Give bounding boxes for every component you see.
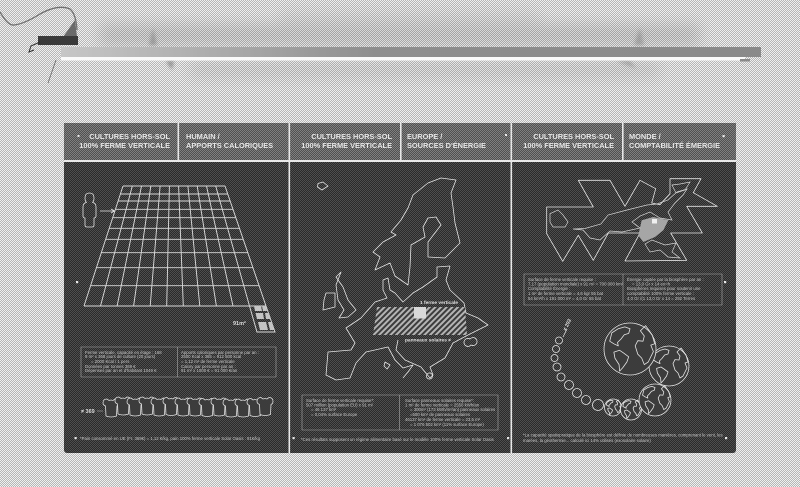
- globe: small: [604, 399, 622, 416]
- map: hatched solar panel area: [373, 307, 467, 335]
- heading: panel 2 left: 100% FERME VERTICALE: [301, 141, 392, 150]
- label: ferme verticale: 1 ferme verticale: [420, 300, 458, 306]
- text box: panel 2: 46137 km² de ferme verticale = 23,5 m²: [405, 417, 481, 422]
- text box: panel 3: Surface de ferme verticale requise :: [528, 277, 596, 282]
- heading: panel 1 right: APPORTS CALORIQUES: [186, 141, 273, 150]
- text box: panel 2: Surface panneaux solaires requise*:: [405, 398, 474, 403]
- text box: panel 3: Biosphères requises pour soutenir une: [627, 286, 701, 291]
- arrow: person to grid: [100, 209, 114, 213]
- text box: panel 1: Calory par personne par an :: [181, 364, 236, 369]
- label: earth count: ≠ 292: [562, 318, 573, 332]
- footnote: panel 3: marées, la géothermie... calculé ici 14% utilisés (exosolaire solaire): [523, 438, 651, 443]
- text box: panel 3: Énergie captée par la biosphère par an :: [627, 277, 704, 282]
- icon: person: [83, 193, 96, 227]
- globe: large: [649, 346, 689, 386]
- text box: panel 2: [302, 395, 498, 430]
- heading: panel 3 right: MONDE /: [629, 132, 661, 141]
- heading: panel 3 right: COMPTABILITÉ ÉMERGIE: [629, 141, 720, 150]
- globe: medium: [639, 384, 671, 416]
- text box: panel 3: 1 m² de ferme verticale = 4,6 kgr 55 bat: [528, 291, 604, 296]
- text box: panel 1: Ferme verticale, capacité en étage : 168: [85, 350, 162, 355]
- text box: panel 3: 7,17 (population mondiale) x 91 m² = 700 000 km²: [528, 282, 624, 286]
- text box: panel 3: 4,0 Gr /(1 13,0 Gr x 14 = 292 Terres: [627, 296, 695, 301]
- text box: panel 2: 1 m² de ferme verticale = 2550 kWh/an: [405, 402, 480, 408]
- text box: panel 1: Apports caloriques par personne par an :: [181, 350, 259, 355]
- label: grid area: 91m²: [233, 320, 246, 327]
- text box: panel 2: Surface de ferme verticale requise*:: [306, 398, 374, 403]
- text box: panel 1: = 1,12 m² de ferme verticale: [181, 359, 235, 364]
- globe: largest: [604, 323, 656, 375]
- label: panneaux solaires: panneaux solaires ≠: [405, 338, 451, 344]
- text box: panel 1: 2500 Kcal x 365 = 912 500 kcal: [181, 354, 241, 359]
- text box: panel 3: [524, 274, 722, 305]
- icon: row of bread loaves: [97, 397, 273, 417]
- map: Adriatic and eastern coast: [396, 266, 488, 378]
- chart: spiral of globes: [551, 323, 689, 420]
- heading: panel 2 left: CULTURES HORS-SOL: [311, 132, 392, 141]
- lamp: light fixture with wire: [0, 7, 761, 83]
- text box: panel 3: 54 km²/h x 191 000 m² = 4,0 Gr 55 bat: [528, 296, 602, 301]
- text box: panel 2: 507 million (population EU) x 91 m²: [306, 402, 374, 408]
- map: Iceland: [318, 182, 328, 190]
- heading: panel 1 left: CULTURES HORS-SOL: [89, 132, 170, 141]
- text box: panel 3: Comptabilité Énergie :: [528, 286, 570, 291]
- footnote: panel 2: *Ces résultats supposent un régime alimentaire basé sur le modèle 100% ferme verticale Solar Oasis: [301, 437, 494, 442]
- map: continents: [550, 182, 690, 258]
- map: northern and western coast: [326, 266, 450, 380]
- header band: [64, 123, 736, 453]
- text box: panel 3: = 13,0 Gr x 14 ex=h: [632, 282, 671, 286]
- footnote: panel 1: *Pain consommé en UE (Fr. 369€) = 1,12 €/kg, pain 100% ferme verticale Solar Oasis : 91€/kg: [80, 436, 261, 441]
- label: loaves count: ≠ 369: [81, 409, 95, 415]
- text box: panel 2: = 46 137 km²: [311, 407, 337, 412]
- heading: panel 1 left: 100% FERME VERTICALE: [79, 141, 170, 150]
- map: Great Britain: [336, 272, 356, 318]
- icon: vertical farm square: [414, 307, 426, 318]
- map: Dymaxion world: [547, 179, 717, 261]
- map: Ireland: [323, 293, 335, 310]
- icon: white farm square: [652, 219, 657, 224]
- heading: panel 3 left: CULTURES HORS-SOL: [533, 132, 614, 141]
- text box: panel 2: = 300m² (173 kWh/m²/an) panneaux solaires: [410, 407, 495, 412]
- markers: small square dots: [74, 134, 727, 439]
- text box: panel 3: comptabilité 100% ferme verticale :: [627, 291, 694, 296]
- map: grey shaded area: [638, 217, 668, 242]
- text box: panel 1: 91 m² x 1000 € = 91 000 €/an: [181, 368, 238, 373]
- heading: panel 2 right: SOURCES D'ÉNERGIE: [407, 141, 486, 150]
- panel: board background: [64, 123, 736, 453]
- text box: panel 1: Dépenses par an et d'habitant 1049 €: [85, 368, 157, 373]
- map: islands: [384, 338, 477, 379]
- heading: panel 1 right: HUMAIN /: [186, 132, 220, 141]
- globe: medium-small: [620, 399, 642, 420]
- text box: panel 2: = 0,04% surface Europe: [311, 412, 358, 417]
- text box: panel 1: 9 m² x 368 jours de culture (20 jours): [85, 354, 156, 359]
- text box: panel 2: = 1 076 502 km² (11% surface Europe): [410, 422, 484, 427]
- footnote: panel 3: *La capacité spatiopratique de la biosphère est définie de nombreuses manières, comprenant le vent, les: [523, 432, 723, 438]
- heading: panel 2 right: EUROPE /: [407, 132, 442, 141]
- text box: panel 1: [81, 347, 276, 377]
- text box: panel 1: Données par tonnes 369 €: [85, 364, 136, 369]
- map: Europe: [318, 178, 488, 380]
- icon: small detail cell of grid: [250, 306, 275, 332]
- text box: panel 1: = 2000 Kcal / 1 pers: [91, 359, 129, 364]
- text box: panel 2: =500 km² de panneaux solaires: [410, 412, 470, 417]
- heading: panel 3 left: 100% FERME VERTICALE: [523, 141, 614, 150]
- map: Scandinavia: [373, 178, 460, 285]
- chart: perspective grid: [84, 186, 266, 306]
